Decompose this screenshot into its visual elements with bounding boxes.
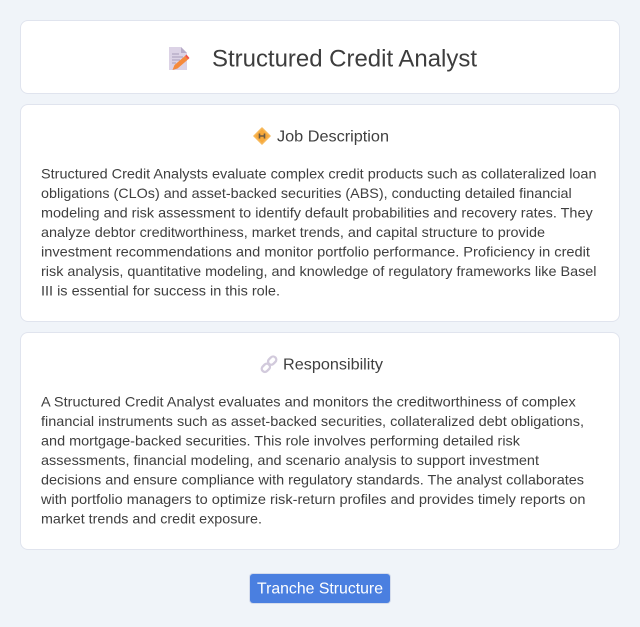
text block: responsibility: market trends and credit exposure. [41, 510, 262, 526]
text block: responsibility: and mortgage-backed securities. This role involves performing detailed risk [41, 432, 521, 448]
button: tranche structure [250, 574, 390, 603]
title: Structured Credit Analyst [212, 46, 477, 72]
text block: responsibility: with portfolio managers to optimize risk-return profiles and provides timely reports on [40, 491, 586, 507]
text block: job description: modeling and risk assessment to identify default probabilities and recovery rates. They [41, 204, 593, 220]
text block: job description: III is essential for success in this role. [41, 282, 280, 298]
icon: diamond sign [253, 127, 271, 145]
text block: job description: analyze debtor creditworthiness, market trends, and capital structure to provide [41, 224, 545, 240]
text block: responsibility: A Structured Credit Analyst evaluates and monitors the creditworthiness of complex [41, 394, 576, 410]
text block: job description: obligations (CLOs) and asset-backed securities (ABS), conducting detailed financial [41, 185, 572, 201]
panel: title card [20, 20, 620, 94]
panel: job description [20, 104, 620, 322]
text block: job description: Structured Credit Analysts evaluate complex credit products such as collateralized loan [41, 166, 596, 182]
button: tranche structure: Tranche Structure [257, 580, 383, 598]
text block: responsibility [40, 394, 586, 526]
panel: responsibility [20, 332, 620, 550]
text block: job description: investment recommendations and monitor portfolio performance. Proficiency in credit [41, 244, 590, 260]
text block: job description: risk analysis, quantitative modeling, and knowledge of regulatory frameworks like Basel [41, 263, 596, 279]
text block: responsibility: decisions and ensure compliance with regulatory standards. The analyst collaborates [41, 472, 584, 488]
icon: document with pencil [169, 47, 190, 70]
icon: chain link [260, 355, 278, 374]
text block: responsibility: assessments, financial modeling, and scenario analysis to support investment [41, 452, 539, 468]
heading: responsibility: Responsibility [283, 356, 383, 374]
heading: job description: Job Description [277, 128, 389, 146]
text block: job description [41, 166, 596, 298]
text block: responsibility: financial instruments such as asset-backed securities, collateralized debt obligations, [41, 413, 584, 429]
